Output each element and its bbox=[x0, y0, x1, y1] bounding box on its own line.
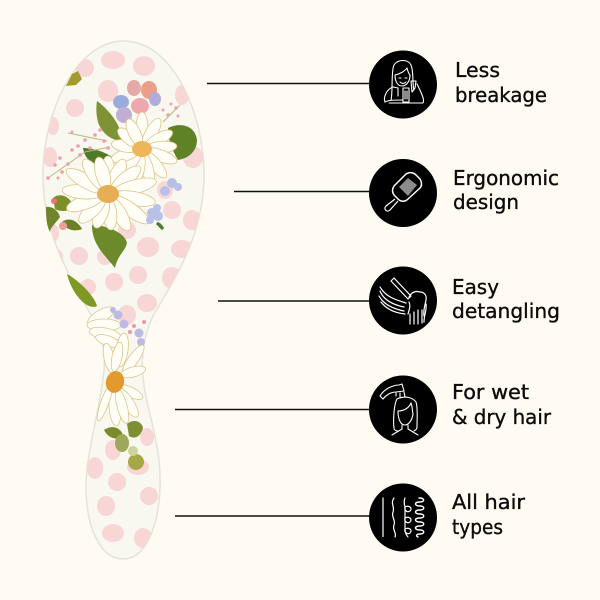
label: Ergonomic design: design bbox=[453, 190, 519, 214]
label: Ergonomic design bbox=[453, 166, 559, 214]
label: Easy detangling bbox=[452, 275, 560, 323]
label: Less breakage: Less bbox=[455, 58, 500, 82]
small lilac flowers bbox=[110, 307, 146, 346]
daisy, large bbox=[62, 155, 158, 234]
label: Less breakage: breakage bbox=[455, 83, 547, 107]
butterfly bbox=[66, 71, 82, 86]
label: Less breakage bbox=[455, 58, 547, 107]
pink polka dots bbox=[43, 51, 203, 548]
label: For wet and dry hair bbox=[452, 380, 552, 429]
label: All hair types: All hair bbox=[452, 490, 526, 514]
label: Easy detangling: Easy bbox=[452, 275, 499, 299]
label: For wet and dry hair: For wet bbox=[452, 380, 529, 404]
icon: paddle brush bbox=[369, 159, 437, 227]
leaves bbox=[46, 101, 197, 307]
icon: detangling hair bbox=[369, 266, 437, 334]
green buds and leaves, handle bbox=[104, 421, 144, 470]
daisy, upper bbox=[109, 112, 179, 186]
daisy, lower left partial bbox=[85, 303, 122, 350]
label: Ergonomic design: Ergonomic bbox=[453, 166, 559, 190]
icon: hair types bbox=[369, 484, 437, 552]
tulips bbox=[113, 80, 161, 123]
leader lines bbox=[175, 84, 372, 516]
label: All hair types bbox=[452, 490, 526, 539]
hair brush illustration bbox=[43, 41, 204, 559]
label: Easy detangling: detangling bbox=[452, 299, 560, 323]
label: All hair types: types bbox=[452, 515, 503, 539]
icon: shower and hair bbox=[369, 376, 437, 444]
daisy, handle bbox=[94, 332, 147, 426]
pink sprigs bbox=[46, 102, 180, 180]
label: For wet and dry hair: & dry hair bbox=[452, 405, 552, 429]
icon: woman brushing hair bbox=[369, 50, 437, 118]
forget-me-nots bbox=[146, 178, 182, 229]
